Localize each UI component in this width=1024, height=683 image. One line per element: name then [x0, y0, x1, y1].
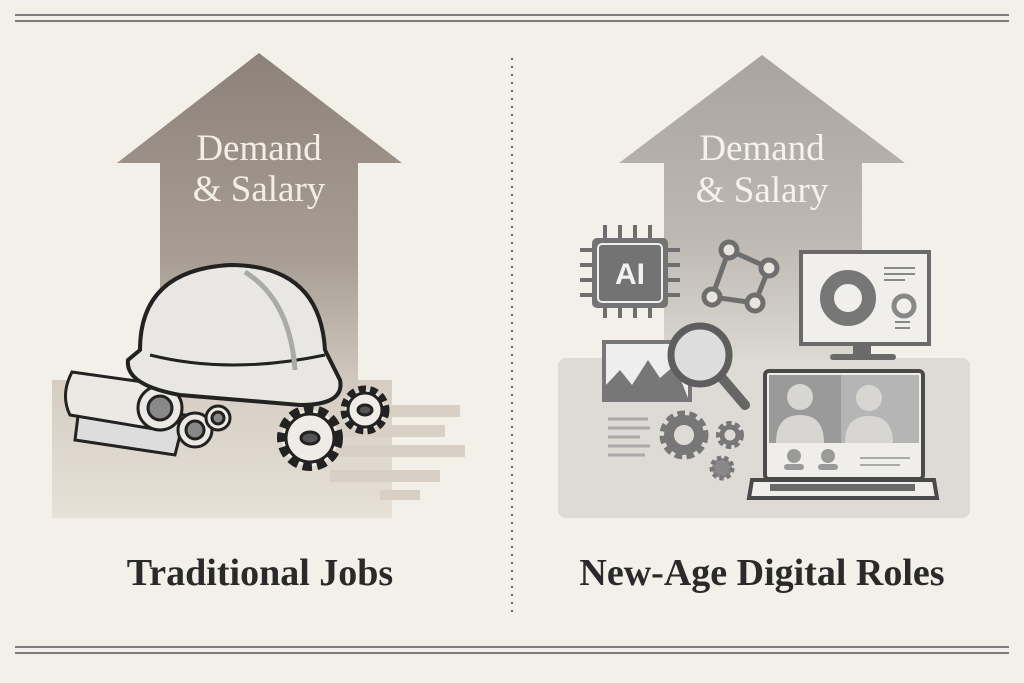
top rule: [15, 15, 1009, 21]
icon: gears: [664, 415, 741, 478]
bottom rule: [15, 647, 1009, 653]
icon: dashboard monitor: [801, 252, 929, 360]
heading: new-age digital roles: New-Age Digital Roles: [579, 552, 945, 594]
arrow: demand & salary: & Salary: [696, 170, 829, 211]
icon: hard hat: [128, 265, 341, 405]
arrow: demand & salary: Demand: [699, 128, 825, 169]
arrow: demand & salary: [117, 53, 402, 400]
icon: AI chip: AI: [615, 258, 645, 291]
panel: traditional jobs: [52, 53, 465, 518]
icon: magnifier: [671, 326, 745, 405]
ground shading: [52, 380, 465, 518]
icon: network: [704, 242, 777, 311]
icon: image: [604, 342, 690, 400]
ground shading: [558, 358, 970, 518]
icon: laptop video call: [749, 371, 937, 498]
heading: traditional jobs: Traditional Jobs: [127, 552, 393, 594]
icon: blueprints: [65, 372, 230, 455]
divider: [511, 58, 513, 618]
icon: gears: [282, 390, 385, 466]
arrow: demand & salary: [619, 55, 905, 360]
icon: AI chip: [580, 225, 680, 318]
panel: new-age digital roles: [558, 55, 970, 518]
arrow: demand & salary: & Salary: [193, 169, 326, 210]
text lines: [608, 419, 650, 455]
arrow: demand & salary: Demand: [196, 128, 322, 169]
